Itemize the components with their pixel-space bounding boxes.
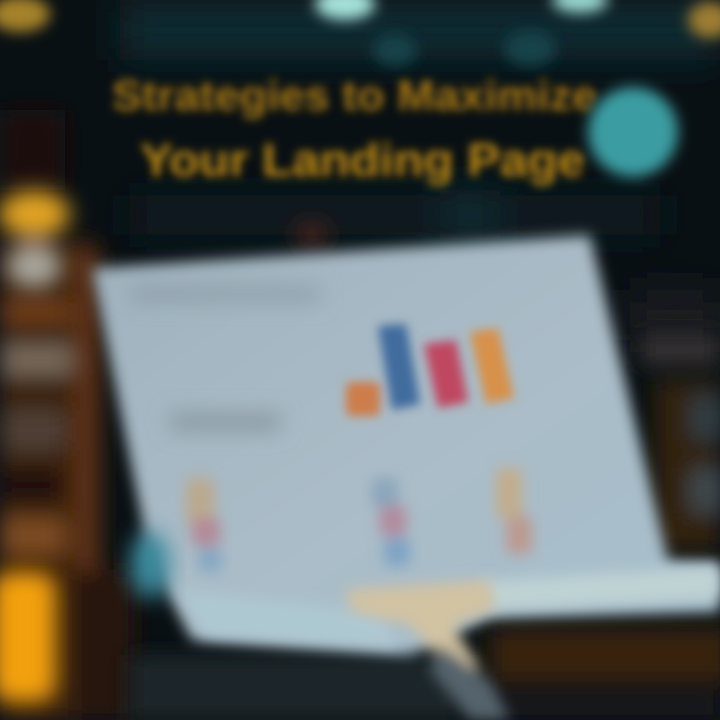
right shelf — [640, 335, 720, 550]
teal circle — [588, 87, 678, 177]
top teal lights — [315, 0, 608, 66]
corner lights — [0, 0, 720, 38]
paper fold — [180, 566, 720, 648]
title: Strategies to Maximize — [112, 72, 597, 120]
small chart: left — [186, 478, 222, 572]
paper header lines — [130, 287, 320, 430]
table — [130, 628, 720, 720]
small red glow — [294, 220, 330, 250]
title: Your Landing Page — [140, 134, 585, 186]
bar chart — [346, 324, 514, 416]
left lamp: upper glow — [0, 190, 70, 288]
left bookshelf — [0, 110, 135, 720]
panel: paper document — [92, 235, 720, 655]
left lamp: lower glow — [0, 572, 56, 702]
small chart: right — [496, 468, 532, 554]
small chart: middle — [372, 478, 410, 566]
hand — [345, 580, 510, 720]
background: upper teal haze — [120, 0, 720, 340]
title — [112, 72, 597, 186]
teal cup — [130, 531, 170, 599]
